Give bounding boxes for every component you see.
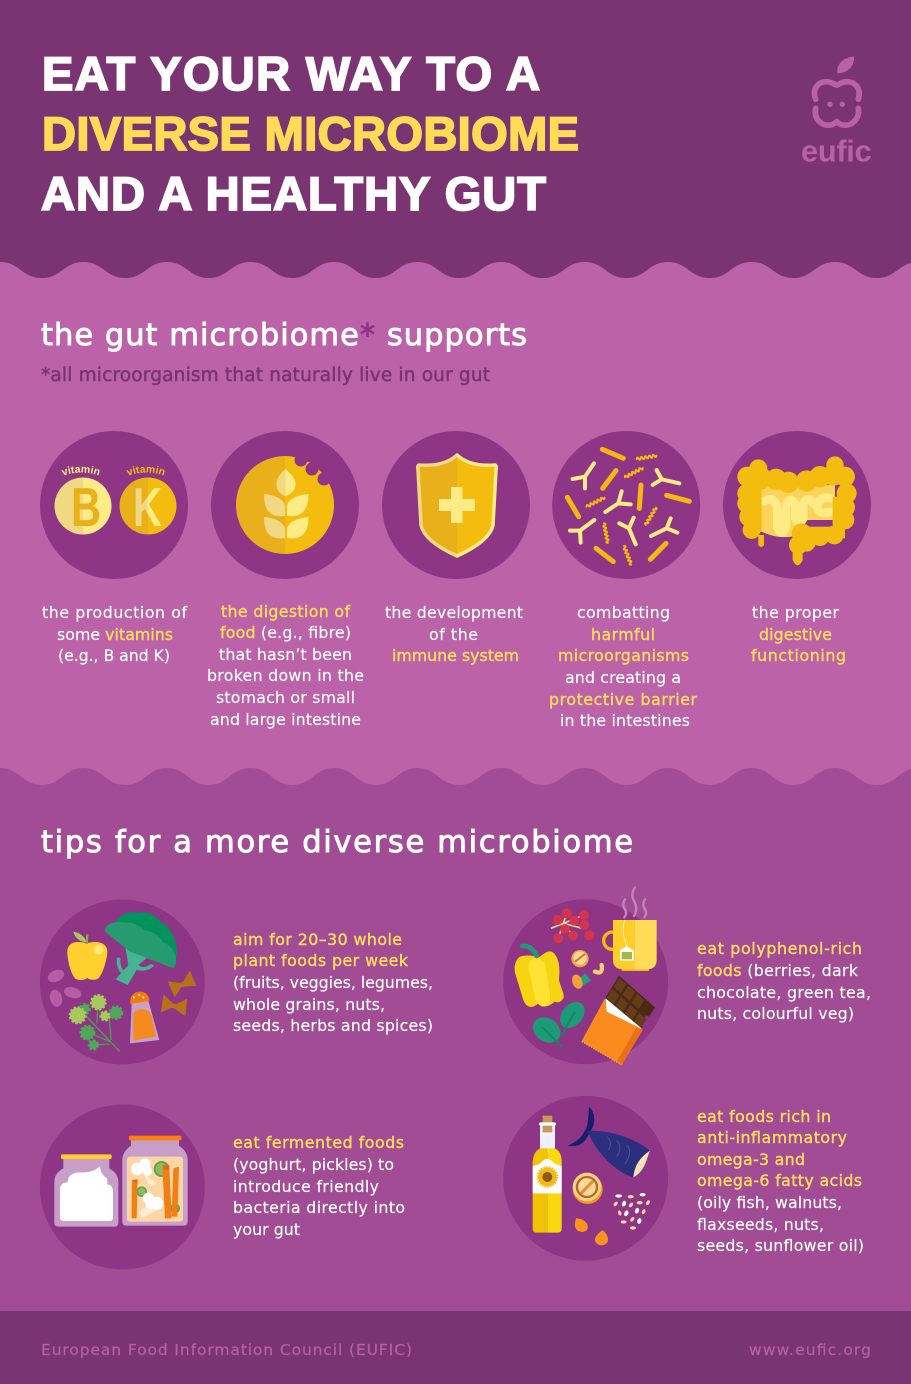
- text: tip whole plant foods: plant foods per week: [233, 951, 409, 970]
- text: tip anti-inflammatory fatty acids: flaxseeds, nuts,: [697, 1215, 824, 1234]
- heading: the gut microbiome supports: the gut microbiome* supports: [41, 318, 527, 353]
- icon: whole plant foods: [40, 899, 205, 1064]
- icon: vitamins B and K: B: [71, 476, 101, 538]
- icon: vitamins B and K: vitamin: [126, 466, 164, 476]
- icon: polyphenol-rich foods: [503, 887, 668, 1065]
- text: immune system benefit: the development: [385, 603, 523, 622]
- title: EAT YOUR WAY TO A: [42, 47, 540, 100]
- icon: fermented food jars: [40, 1104, 205, 1269]
- text: tip whole plant foods: [233, 930, 433, 1035]
- icon: bitten wholegrain biscuit: [211, 431, 359, 579]
- text: digestion benefit: that hasn’t been: [219, 645, 352, 664]
- text: tip whole plant foods: aim for 20–30 whole: [233, 930, 402, 949]
- text: digestion benefit: stomach or small: [216, 688, 355, 707]
- heading: tips for a more diverse microbiome: tips for a more diverse microbiome: [41, 825, 633, 860]
- text: footer website: www.eufic.org: [749, 1341, 871, 1359]
- text: vitamins benefit: (e.g., B and K): [58, 646, 170, 665]
- text: asterisk footnote: *all microorganism that naturally live in our gut: [41, 365, 490, 386]
- text: tip anti-inflammatory fatty acids: (oily fish, walnuts,: [697, 1193, 842, 1212]
- text: immune system benefit: [385, 603, 523, 665]
- title: [41, 47, 579, 220]
- text: tip anti-inflammatory fatty acids: omega-6 fatty acids: [697, 1171, 862, 1190]
- icon: eufic logo: eufic: [801, 134, 872, 168]
- icon: harmful microorganisms: [552, 431, 700, 579]
- text: tip polyphenol-rich foods: [697, 939, 871, 1023]
- icon: vitamins B and K: vitamin: [61, 466, 100, 476]
- text: tip fermented foods: introduce friendly: [233, 1177, 379, 1196]
- text: digestive functioning benefit: [751, 603, 846, 665]
- text: protective barrier benefit: protective barrier: [549, 690, 698, 709]
- text: tip polyphenol-rich foods: chocolate, green tea,: [697, 983, 871, 1002]
- text: digestive functioning benefit: the proper: [752, 603, 840, 622]
- text: immune system benefit: of the: [429, 625, 478, 644]
- text: tip fermented foods: your gut: [233, 1220, 300, 1239]
- text: digestion benefit: the digestion of: [221, 602, 350, 621]
- text: digestion benefit: food (e.g., fibre): [220, 623, 351, 642]
- text: vitamins benefit: some vitamins: [57, 625, 173, 644]
- title: AND A HEALTHY GUT: [41, 167, 546, 220]
- text: immune system benefit: immune system: [392, 646, 519, 665]
- text: tip anti-inflammatory fatty acids: [697, 1107, 864, 1255]
- text: tip anti-inflammatory fatty acids: omega-3 and: [697, 1150, 805, 1169]
- text: protective barrier benefit: harmful: [591, 625, 655, 644]
- text: protective barrier benefit: and creating a: [565, 668, 681, 687]
- text: protective barrier benefit: [549, 603, 698, 730]
- text: tip polyphenol-rich foods: foods (berries, dark: [697, 961, 859, 980]
- text: protective barrier benefit: microorganisms: [558, 646, 689, 665]
- text: footer organisation name: European Food Information Council (EUFIC): [41, 1341, 412, 1359]
- icon: vitamins B and K: K: [133, 476, 162, 538]
- text: digestive functioning benefit: digestive: [759, 625, 832, 644]
- text: protective barrier benefit: in the intestines: [560, 711, 690, 730]
- panel: footer background: [0, 1311, 911, 1384]
- panel: tips section with wavy top: [0, 768, 911, 1320]
- text: tip fermented foods: (yoghurt, pickles) to: [233, 1155, 394, 1174]
- text: tip fermented foods: bacteria directly into: [233, 1198, 405, 1217]
- text: tip whole plant foods: (fruits, veggies, legumes,: [233, 973, 433, 992]
- text: tip anti-inflammatory fatty acids: seeds, sunflower oil): [697, 1236, 864, 1255]
- text: vitamins benefit: [42, 603, 187, 665]
- icon: vitamins B and K: [40, 431, 188, 579]
- text: tip fermented foods: [233, 1133, 405, 1239]
- text: digestion benefit: broken down in the: [207, 666, 364, 685]
- text: vitamins benefit: the production of: [42, 603, 187, 622]
- text: tip anti-inflammatory fatty acids: eat foods rich in: [697, 1107, 831, 1126]
- text: digestive functioning benefit: functioning: [751, 646, 846, 665]
- text: tip whole plant foods: whole grains, nuts,: [233, 995, 385, 1014]
- text: tip fermented foods: eat fermented foods: [233, 1133, 404, 1152]
- icon: immune shield: [382, 431, 530, 579]
- text: tip whole plant foods: seeds, herbs and spices): [233, 1016, 433, 1035]
- text: digestion benefit: and large intestine: [210, 710, 361, 729]
- text: tip polyphenol-rich foods: nuts, colourful veg): [697, 1004, 854, 1023]
- panel: header background: [0, 0, 911, 290]
- text: protective barrier benefit: combatting: [577, 603, 670, 622]
- text: digestion benefit: [207, 602, 364, 729]
- icon: omega-rich foods: [503, 1096, 668, 1261]
- text: tip anti-inflammatory fatty acids: anti-inflammatory: [697, 1128, 847, 1147]
- icon: intestines: [723, 431, 871, 579]
- text: tip polyphenol-rich foods: eat polyphenol-rich: [697, 939, 862, 958]
- title: DIVERSE MICROBIOME: [42, 107, 579, 160]
- panel: gut microbiome section with wavy top: [0, 262, 911, 800]
- icon: eufic logo: [801, 57, 872, 168]
